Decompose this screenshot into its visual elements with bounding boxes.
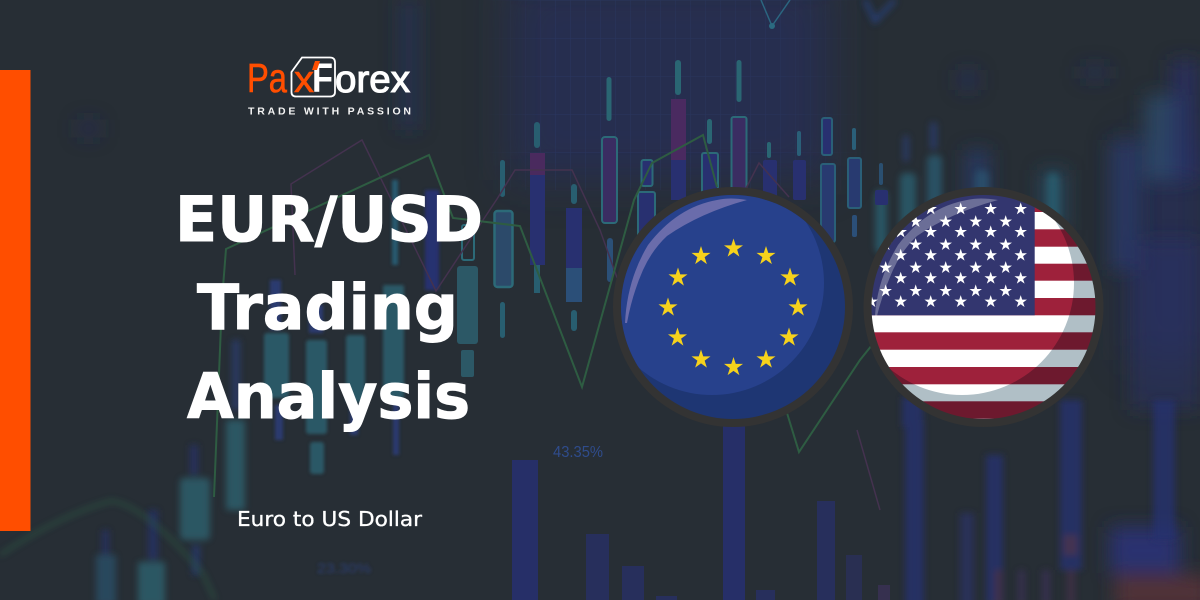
chart label 43.35%: 43.35% [553,444,603,461]
green line [214,135,880,497]
icon: US flag badge [864,187,1104,427]
US flag shade [890,221,1096,419]
lower left blurred line [0,501,215,600]
orange side bar [0,70,30,531]
chart grid [514,0,818,190]
magenta line [291,140,880,510]
logo box [292,58,335,96]
logo letter x: x [294,59,314,101]
US gloss highlight [875,198,998,316]
US canton [865,190,1035,315]
teal V line [761,0,790,26]
US red stripes [872,207,1096,419]
title line 3: Analysis [187,360,470,433]
sharp candles [264,180,439,474]
icon: EU flag badge [613,187,853,427]
title line 2: Trading [197,271,458,344]
logo: PaxForex [247,55,411,118]
blue glow [510,0,1200,360]
EU gloss highlight [625,198,747,323]
US stars [865,202,1027,307]
logo letter F: F [312,55,333,101]
logo slash [312,61,320,70]
logo word Pa: Pa [247,55,287,101]
title line 1: EUR/USD [175,183,483,256]
subtitle: Euro to US Dollar [237,507,423,531]
blurred mid candles [96,122,1175,600]
EU stars [658,238,808,375]
logo tagline: TRADE WITH PASSION [248,106,411,118]
title [175,183,483,433]
chart label 23.30%: 23.30% [317,560,371,576]
logo word orex: orex [335,59,410,101]
